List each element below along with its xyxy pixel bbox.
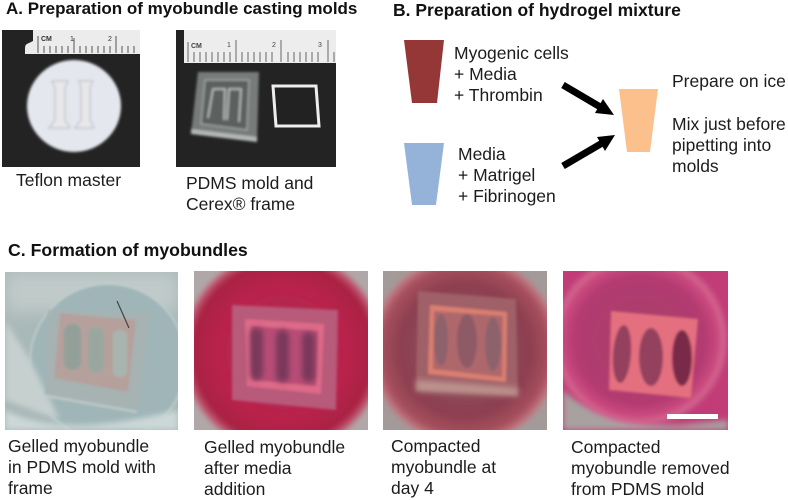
ruler: 2 xyxy=(272,42,276,49)
text: mix instruction: pipetting into xyxy=(672,135,771,155)
scale bar xyxy=(667,414,718,419)
text: mix instruction: molds xyxy=(672,156,719,176)
caption 1 xyxy=(8,436,156,498)
ruler: CM xyxy=(191,43,202,50)
photo: PDMS mold and Cerex frame xyxy=(176,30,336,167)
text: media mix: + Matrigel xyxy=(458,165,535,185)
ruler: 1 xyxy=(227,42,231,49)
caption 4: myobundle removed xyxy=(571,458,730,478)
figure graphics xyxy=(2,30,728,430)
caption 1: in PDMS mold with xyxy=(8,457,156,477)
caption 1: frame xyxy=(8,478,53,498)
photo: gelled myobundle after media xyxy=(194,271,368,430)
caption 2: addition xyxy=(204,479,265,499)
photo: compacted myobundle removed xyxy=(563,271,728,430)
ruler xyxy=(184,30,336,63)
cup: myogenic cells xyxy=(404,40,444,103)
caption: PDMS mold xyxy=(186,173,313,214)
caption 2: Gelled myobundle xyxy=(204,437,345,457)
photo: compacted myobundle day 4 xyxy=(383,271,547,430)
text: cells mix: + Media xyxy=(454,64,517,84)
text: cells mix xyxy=(454,43,569,105)
text: mix instruction xyxy=(672,114,786,176)
text: ice: Prepare on ice xyxy=(672,71,786,91)
ruler: CM xyxy=(41,36,52,43)
caption 4: from PDMS mold xyxy=(571,479,704,499)
arrow: media to mix xyxy=(563,135,615,166)
ruler: 1 xyxy=(70,36,74,43)
text: media mix xyxy=(458,144,556,206)
caption 2: after media xyxy=(204,458,292,478)
Teflon disc xyxy=(27,60,121,152)
text: mix instruction: Mix just before xyxy=(672,114,786,134)
ruler: 2 xyxy=(108,36,112,43)
ruler xyxy=(25,30,140,54)
text: media mix: + Fibrinogen xyxy=(458,186,556,206)
photo: gelled myobundle in mold xyxy=(5,272,178,430)
cup: media with Matrigel xyxy=(404,143,444,205)
caption 3: day 4 xyxy=(391,478,434,498)
caption 3: myobundle at xyxy=(391,457,496,477)
photo: Teflon master xyxy=(2,30,140,167)
caption 2 xyxy=(204,437,345,499)
ruler: 3 xyxy=(318,42,322,49)
caption: PDMS mold: Cerex® frame xyxy=(186,194,295,214)
heading B: B. Preparation of hydrogel mixture xyxy=(393,0,681,20)
text: cells mix: Myogenic cells xyxy=(454,43,569,63)
text: media mix: Media xyxy=(458,144,506,164)
PDMS mold xyxy=(191,72,259,142)
caption: Teflon master: Teflon master xyxy=(16,170,121,190)
arrow: cells to mix xyxy=(563,85,614,115)
caption 4: Compacted xyxy=(571,437,660,457)
cup: mixed hydrogel xyxy=(619,89,658,152)
caption 4 xyxy=(571,437,730,499)
heading C: C. Formation of myobundles xyxy=(8,240,248,260)
text: cells mix: + Thrombin xyxy=(454,85,543,105)
Cerex frame xyxy=(273,86,319,126)
caption 1: Gelled myobundle xyxy=(8,436,149,456)
caption 3: Compacted xyxy=(391,436,480,456)
caption: PDMS mold: PDMS mold and xyxy=(186,173,313,193)
caption 3 xyxy=(391,436,496,498)
